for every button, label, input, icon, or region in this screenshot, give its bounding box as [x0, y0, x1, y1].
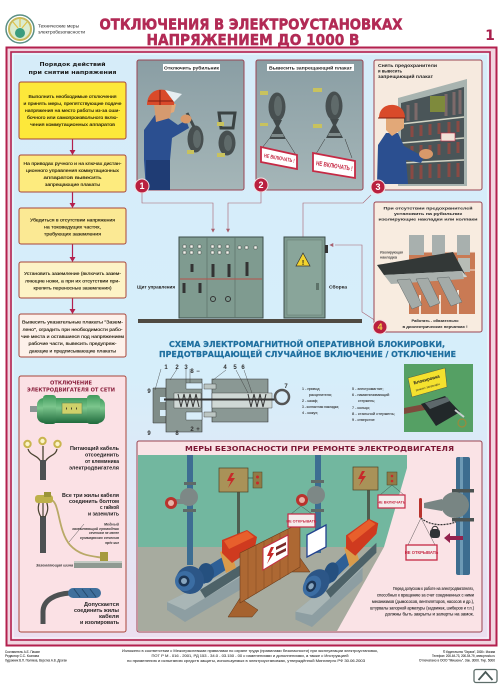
footer: credits	[5, 650, 67, 662]
diagram numbers: 1	[164, 365, 168, 371]
joint text: кабеля	[99, 613, 119, 620]
diagram legend: 5 - электромагнит;	[352, 387, 384, 391]
right pump unit	[295, 516, 378, 632]
floor	[138, 319, 362, 323]
diagram numbers: 4	[223, 365, 227, 371]
label: assembly: Сборка	[329, 284, 348, 290]
panel text	[378, 206, 478, 222]
step box 5: чие места и оставшиеся под напряжением	[21, 334, 124, 339]
panel text: изолирующие накладки или колпаки	[378, 216, 478, 222]
label	[378, 63, 438, 79]
label: Вывесить запрещающий плакат	[269, 66, 352, 70]
sign: do not switch on, large: НЕ ВКЛЮЧАТЬ !	[315, 160, 353, 173]
step box 5: дающие и предписывающие плакаты	[29, 348, 116, 354]
right pipe with valve	[296, 455, 325, 553]
icon: switches with signs	[260, 88, 352, 158]
grounding text: соединить болтом	[69, 498, 119, 505]
panel: motor disconnection	[19, 376, 126, 632]
conductor note: суммарного сечения	[80, 536, 120, 540]
gloves note: Работать - обязательно	[412, 318, 459, 323]
joint text: соединить жилы	[74, 608, 119, 614]
step box 1: чения коммутационных аппаратов	[30, 122, 116, 127]
cable text: от клеммника	[85, 459, 119, 465]
diagram legend: 6 - намагничивающий	[352, 393, 389, 397]
label: control panel: Щит управления	[137, 284, 176, 290]
diagram legend: 3 - контактная накладка;	[302, 405, 339, 409]
scroll-up button icon	[474, 670, 497, 682]
panel: motor repair safety	[137, 441, 482, 632]
joint text: Допускается	[84, 602, 119, 608]
cable text	[69, 445, 119, 472]
diagram numbers	[147, 365, 288, 437]
heading: interlock scheme	[159, 338, 456, 359]
worker	[377, 105, 433, 184]
left pump unit	[167, 530, 257, 622]
label: и вывесить	[378, 68, 402, 74]
title: ОТКЛЮЧЕНИЯ В ЭЛЕКТРОУСТАНОВКАХ	[100, 16, 403, 34]
joint text: и изолировать	[80, 620, 119, 626]
safety note: штурвалы запорной арматуры (задвижек, шиберов и т.п.)	[370, 606, 475, 610]
cable text: электродвигателя	[69, 466, 119, 472]
panel text: установить на рубильник	[394, 211, 462, 216]
grounding text	[62, 492, 119, 518]
icon: insulated joint	[43, 588, 101, 624]
diagram legend: расцепителя;	[309, 393, 332, 397]
icon: cable with three lugs	[24, 438, 61, 480]
gloves note: в диэлектрических перчатках !	[402, 324, 468, 329]
panel heading	[27, 380, 115, 394]
connector lines	[142, 192, 376, 321]
heading: interlock scheme: СХЕМА ЭЛЕКТРОМАГНИТНОЙ ОПЕРАТИВНОЙ БЛОКИРОВКИ,	[169, 338, 445, 349]
switch handles	[184, 262, 247, 293]
step box 4: ляющие ножи, а при их отсутствии при-	[25, 278, 121, 284]
safety note: Перед допуском к работе на электродвигателях,	[393, 586, 474, 591]
footer: credits: Редактор С.С. Козлова	[5, 654, 39, 658]
icon: switches	[187, 113, 236, 157]
photo: interlock lock: Блокировка	[413, 374, 441, 385]
step box 3: на токоведущих частях,	[44, 224, 101, 230]
step box 4: крепить переносные заземления)	[34, 286, 112, 290]
interlock diagram	[147, 365, 289, 437]
diagram numbers: 7	[284, 384, 288, 390]
title: НАПРЯЖЕНИЕМ ДО 1000 В	[146, 31, 360, 49]
diagram numbers: 6	[241, 365, 245, 371]
logo caption	[38, 24, 85, 34]
logo caption: Технические меры	[38, 24, 79, 28]
sign: НЕ ОТКРЫВАТЬ	[405, 550, 438, 555]
panel text: При отсутствии предохранителей	[384, 206, 473, 210]
heading: procedure: Порядок действий	[40, 61, 106, 68]
conductor note: сечением не менее	[89, 531, 119, 535]
safety note: должны быть закрыты и заперты на замок.	[385, 612, 474, 616]
step box 2: аппаратов вывесить	[44, 175, 102, 180]
step box 1	[19, 82, 126, 139]
diagram legend: стержень;	[358, 399, 375, 403]
sheet number: 1	[485, 28, 495, 44]
cable text: отсоединить	[85, 452, 119, 458]
step box 4	[19, 262, 126, 298]
grounding text: с гайкой	[100, 504, 119, 511]
diagram numbers: 5	[233, 365, 237, 371]
sign: do not switch on: НЕ ВКЛЮЧАТЬ !	[263, 153, 295, 165]
step box 3: требующих заземления	[44, 232, 102, 236]
step box 5: Вывесить указательные плакаты "Зазем-	[22, 320, 124, 324]
step box 5: лено", оградить при необходимости рабо-	[22, 327, 123, 332]
diagram numbers: −	[196, 369, 200, 375]
cover label: Изолирующая	[380, 250, 403, 254]
illustration: insulating cover	[377, 235, 475, 314]
label: Отключить рубильник	[164, 66, 220, 70]
diagram legend: 1 - привод	[302, 387, 320, 391]
badge 1: 1	[139, 181, 145, 191]
valve detail	[405, 457, 474, 575]
footer: regulations: ПОТ Р М - 016 - 2001, РД 153 - 34.0 - 03.150 - 00 с изменениями и дополнениями, а также с Инструкцией	[152, 653, 348, 658]
padlock	[430, 526, 440, 538]
step box 5: рабочие части, вывесить предупреж-	[28, 341, 117, 346]
panel 4: insulating covers	[374, 202, 482, 332]
diagram numbers: +	[196, 427, 200, 433]
right control box: НЕ ВКЛЮЧАТЬ	[377, 500, 406, 504]
safety note	[370, 586, 475, 616]
step box 3	[19, 208, 126, 244]
badge 4	[373, 320, 387, 334]
panel heading: ОТКЛЮЧЕНИЕ	[50, 380, 92, 386]
cable text: Питающий кабель	[70, 445, 119, 452]
badge 2: 2	[258, 180, 264, 190]
step box 3: Убедиться в отсутствии напряжения	[30, 218, 116, 222]
diagram legend: 7 - кольцо;	[352, 406, 370, 410]
title	[100, 16, 403, 49]
valve sign	[286, 506, 317, 527]
step box 1: и принять меры, препятствующие подаче	[24, 101, 122, 106]
safety note: способных к вращению за счет соединенных с ними	[377, 592, 474, 598]
panel 1: switch off	[135, 60, 244, 193]
arrow pointing at lock	[444, 533, 463, 543]
heading: interlock scheme: ПРЕДОТВРАЩАЮЩЕЙ СЛУЧАЙНОЕ ВКЛЮЧЕНИЕ / ОТКЛЮЧЕНИЕ	[159, 348, 456, 359]
footer: publisher: Отпечатано в ООО "Мишень". Зак. 3000. Тир. 5000	[419, 658, 495, 662]
conductor note: заземляющий проводник	[72, 527, 119, 531]
panel heading: МЕРЫ БЕЗОПАСНОСТИ ПРИ РЕМОНТЕ ЭЛЕКТРОДВИГАТЕЛЯ	[185, 444, 454, 453]
diagram legend: 2 - шкаф;	[302, 399, 318, 403]
barrier fence	[228, 523, 310, 617]
photo: interlock lock	[404, 364, 473, 432]
step box 4: Установить заземление (включить зазем-	[24, 271, 122, 276]
icon: warning triangle: !	[302, 260, 304, 267]
badge 3: 3	[375, 182, 381, 192]
diagram numbers: 8	[175, 431, 179, 437]
scene: wall and floor	[138, 455, 407, 631]
left control box	[219, 468, 262, 534]
step box 2: ционного управления коммутационных	[26, 168, 120, 173]
diagram legend: 4 - кожух;	[302, 411, 318, 415]
flow arrows	[70, 139, 76, 314]
diagram legend	[302, 387, 395, 422]
step box 2	[19, 155, 126, 192]
conductor note	[72, 522, 120, 545]
heading: procedure: при снятии напряжения	[28, 70, 117, 76]
panel 3: remove fuses	[371, 60, 482, 194]
footer: credits: Художник В.П. Поляков, Верстка А.В. Дроган	[5, 658, 67, 662]
panel 2: warning poster	[254, 60, 363, 192]
icon: grounded cable	[35, 492, 122, 568]
joint text	[74, 602, 119, 626]
footer: regulations	[122, 648, 378, 663]
step box 5	[19, 314, 126, 357]
footer: publisher	[419, 650, 495, 662]
diagram numbers: 8	[190, 369, 194, 375]
step box 1: напряжения на место работы из-за оши-	[25, 108, 121, 113]
footer: credits: Составитель А.Е. Пашин	[5, 650, 40, 654]
logo	[6, 15, 34, 43]
diagram legend: 9 - отверстие	[352, 418, 375, 422]
diagram numbers: 2	[190, 427, 194, 433]
step box 2: На приводах ручного и на ключах дистан-	[24, 161, 122, 166]
icon: motor	[30, 395, 105, 424]
label: запрещающий плакат	[378, 74, 433, 79]
bus label: Заземляющая шина	[36, 564, 73, 568]
heading: procedure	[28, 61, 117, 76]
gloves note	[402, 318, 468, 329]
conductor note: трёх жил	[105, 541, 120, 545]
control panel	[179, 237, 263, 318]
panel heading: ЭЛЕКТРОДВИГАТЕЛЯ ОТ СЕТИ	[27, 388, 115, 394]
right control box	[353, 467, 406, 526]
photo: interlock lock: ремонт запрещён	[415, 382, 441, 392]
grounding text: и заземлить	[88, 512, 119, 518]
label: Снять предохранители	[378, 63, 438, 68]
assembly cabinet	[284, 237, 328, 318]
cover label	[380, 250, 403, 260]
diagram numbers: 9	[147, 431, 151, 437]
blue sign	[307, 525, 326, 557]
cover label: накладка	[380, 256, 398, 260]
conductor note: Медный	[104, 522, 120, 526]
worker	[144, 90, 192, 190]
left pipe with valve	[165, 455, 198, 565]
footer: regulations: Изложено в соответствии с Межотраслевыми правилами по охране труда (правилами безопасности) при эксплуатации электроустановок,	[122, 648, 378, 653]
badge 4: 4	[377, 322, 383, 332]
step box 1: бочного или самопроизвольного вклю-	[27, 115, 119, 120]
logo caption: электробезопасности	[38, 30, 85, 34]
grounding text: Все три жилы кабеля	[62, 492, 119, 499]
safety note: механизмов (дымососов, вентиляторов, насосов и др.),	[372, 599, 474, 604]
indicator lamps	[183, 245, 257, 254]
cabinet	[398, 79, 467, 186]
step box 2: запрещающие плакаты	[45, 182, 100, 187]
footer: regulations: по применению и испытанию средств защиты, используемых в электроустановках, утверждённой Минэнерго РФ 30.06.2003	[127, 658, 365, 663]
diagram numbers: 9	[147, 389, 151, 395]
step box 1: Выполнить необходимые отключения	[28, 94, 117, 99]
diagram numbers: 2	[175, 365, 179, 371]
diagram legend: 8 - стальной стержень;	[352, 412, 395, 416]
valve sign: НЕ ОТКРЫВАТЬ	[286, 520, 317, 524]
diagram numbers: 3	[184, 365, 188, 371]
